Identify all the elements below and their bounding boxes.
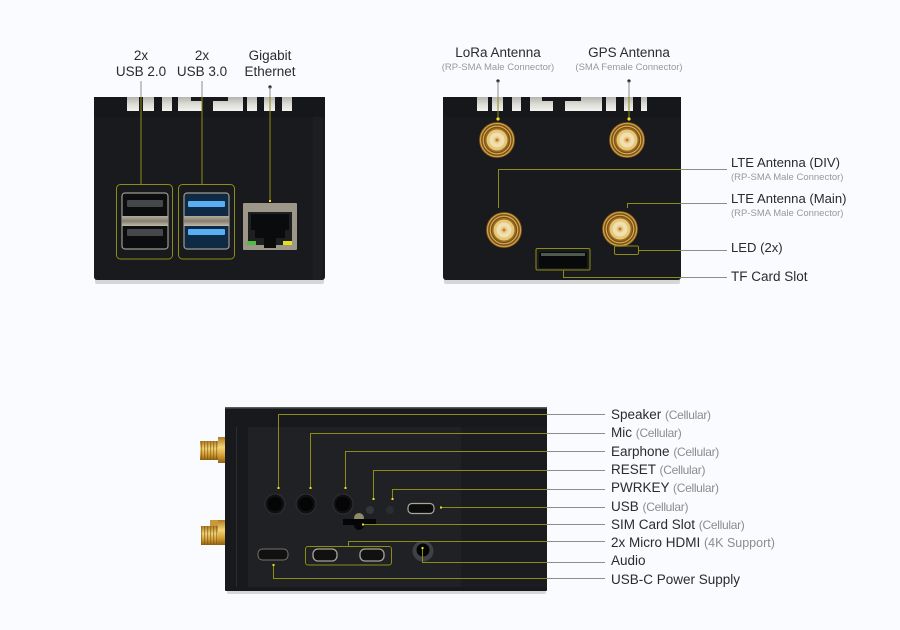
- label: Speaker: Speaker (Cellular): [611, 407, 711, 422]
- label: 2x Micro HDMI: 2x Micro HDMI (4K Support): [611, 535, 775, 550]
- label: LTE Antenna DIV: [731, 155, 843, 183]
- label: Mic: Mic (Cellular): [611, 425, 682, 440]
- callout line: SIM card: [362, 524, 605, 526]
- heatsink fins: [127, 97, 292, 111]
- USB 3.0 highlight box: [178, 184, 234, 259]
- label: LoRa Antenna: [442, 45, 554, 73]
- icon: mic jack: [296, 494, 316, 514]
- icon: earphone jack: [333, 494, 353, 514]
- icon: TF card slot: [539, 252, 587, 268]
- icon: micro USB: [408, 504, 434, 514]
- callout line: LTE Main: [628, 204, 727, 208]
- label: 2x USB 3.0: 2x: [195, 48, 209, 63]
- icon: LTE Main connector: [602, 211, 638, 247]
- label: GPS Antenna: (SMA Female Connector): [575, 62, 683, 73]
- LED highlight box: [614, 246, 638, 254]
- label: LTE Antenna Main: LTE Antenna (Main): [731, 191, 846, 206]
- icon: USB 2.0 ports: [122, 193, 168, 249]
- callout line: USB: [440, 506, 605, 508]
- label: SIM Card Slot: SIM Card Slot (Cellular): [611, 517, 745, 532]
- icon: GPS connector: [609, 122, 645, 158]
- icon: LTE DIV connector: [486, 212, 522, 248]
- label: 2x USB 2.0: USB 2.0: [116, 64, 166, 79]
- icon: LoRa connector: [479, 122, 515, 158]
- callout line: HDMI: [348, 542, 605, 546]
- callout line: USB-C: [272, 564, 605, 578]
- icon: Ethernet port: [243, 203, 297, 250]
- label: LoRa Antenna: (RP-SMA Male Connector): [442, 62, 554, 73]
- icon: SIM slot: [343, 513, 376, 530]
- callout line: GPS: [627, 79, 631, 121]
- callout line: Gigabit Ethernet: [268, 85, 272, 202]
- callout line: LoRa: [496, 79, 500, 121]
- label: 2x USB 3.0: USB 3.0: [177, 64, 227, 79]
- label: Earphone: Earphone (Cellular): [611, 444, 719, 459]
- TF card highlight box: [536, 248, 590, 270]
- label: PWRKEY: PWRKEY (Cellular): [611, 480, 719, 495]
- icon: side antenna connector top: [200, 437, 225, 463]
- callout line: PWRKEY: [392, 490, 605, 500]
- icon: audio jack: [412, 540, 434, 562]
- label: LoRa Antenna: LoRa Antenna: [455, 45, 541, 60]
- label: Gigabit Ethernet: Ethernet: [244, 64, 296, 79]
- label: 2x USB 2.0: 2x: [134, 48, 148, 63]
- label: RESET: RESET (Cellular): [611, 462, 705, 477]
- label: Gigabit Ethernet: Gigabit: [249, 48, 292, 63]
- panel: rear view device: [200, 407, 547, 594]
- label: Gigabit Ethernet: [244, 48, 296, 79]
- icon: speaker jack: [265, 494, 285, 514]
- HDMI highlight box: [306, 546, 392, 565]
- icon: reset button: [366, 506, 374, 514]
- callout line: USB 3.0: [201, 81, 203, 184]
- label: LED: LED (2x): [731, 240, 783, 255]
- callout line: LTE DIV: [498, 170, 727, 208]
- label: LTE Antenna DIV: (RP-SMA Male Connector): [731, 172, 843, 183]
- heatsink fins: [477, 97, 647, 111]
- callout line: Earphone: [344, 452, 605, 489]
- callout line: TF card: [564, 270, 727, 278]
- callout line: Audio: [422, 547, 605, 562]
- label: Audio: Audio: [611, 553, 646, 568]
- callout line: RESET: [372, 470, 605, 500]
- icon: micro HDMI 1: [313, 549, 337, 561]
- label: GPS Antenna: [575, 45, 683, 73]
- label: 2x USB 3.0: [177, 48, 227, 79]
- callout line: USB 2.0: [140, 81, 142, 184]
- icon: pwrkey button: [386, 506, 394, 514]
- icon: side antenna connector bottom: [201, 520, 225, 545]
- callout line: LED: [638, 250, 727, 252]
- icon: micro HDMI 2: [360, 549, 384, 561]
- icon: USB-C: [258, 549, 288, 560]
- label: LTE Antenna Main: [731, 191, 846, 219]
- icon: USB 3.0 ports: [184, 193, 229, 249]
- label: LTE Antenna DIV: LTE Antenna (DIV): [731, 155, 840, 170]
- panel: front view device: [94, 97, 325, 284]
- callout line: Mic: [310, 434, 605, 489]
- USB 2.0 highlight box: [116, 184, 172, 259]
- panel: antenna side device: [443, 97, 681, 284]
- callout line: Speaker: [278, 414, 605, 489]
- label: LTE Antenna Main: (RP-SMA Male Connector): [731, 208, 843, 219]
- label: 2x USB 2.0: [116, 48, 166, 79]
- label: GPS Antenna: GPS Antenna: [588, 45, 670, 60]
- label: USB: USB (Cellular): [611, 499, 688, 514]
- label: USB-C Power Supply: USB-C Power Supply: [611, 572, 740, 587]
- label: TF Card Slot: TF Card Slot: [731, 269, 808, 284]
